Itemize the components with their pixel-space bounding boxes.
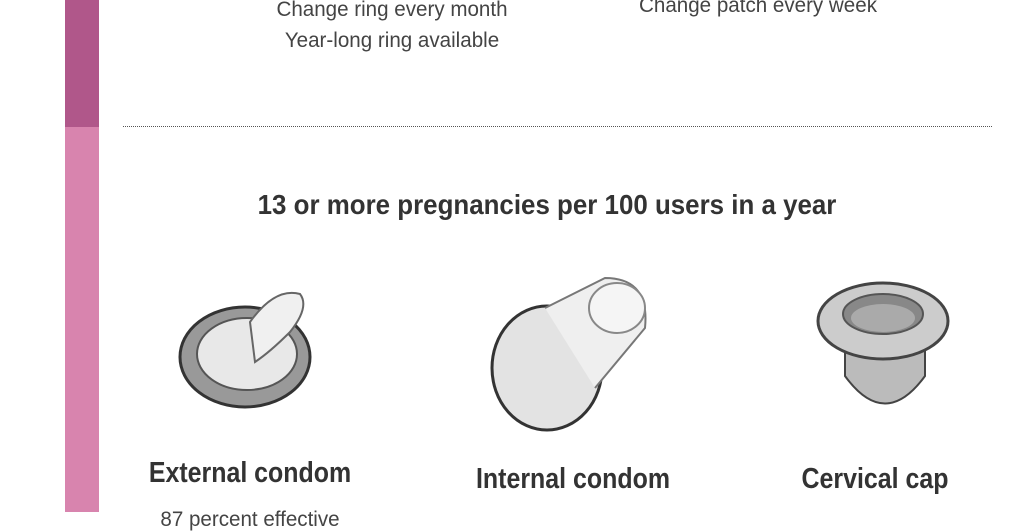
label: external condom: External condom [149, 457, 351, 489]
icon: cervical cap [816, 282, 950, 404]
side bar: light segment [65, 127, 99, 512]
text: effectiveness partial: 87 percent effective [160, 508, 340, 531]
side bar: dark segment [65, 0, 99, 127]
heading: tier: 13 or more pregnancies per 100 users in a year [258, 189, 836, 220]
label: internal condom: Internal condom [476, 463, 670, 495]
icon: external condom [178, 292, 312, 408]
text: ring notes: Year-long ring available [285, 29, 499, 52]
text: ring notes [276, 0, 508, 52]
label: cervical cap: Cervical cap [802, 463, 948, 495]
icon: internal condom [490, 277, 646, 432]
